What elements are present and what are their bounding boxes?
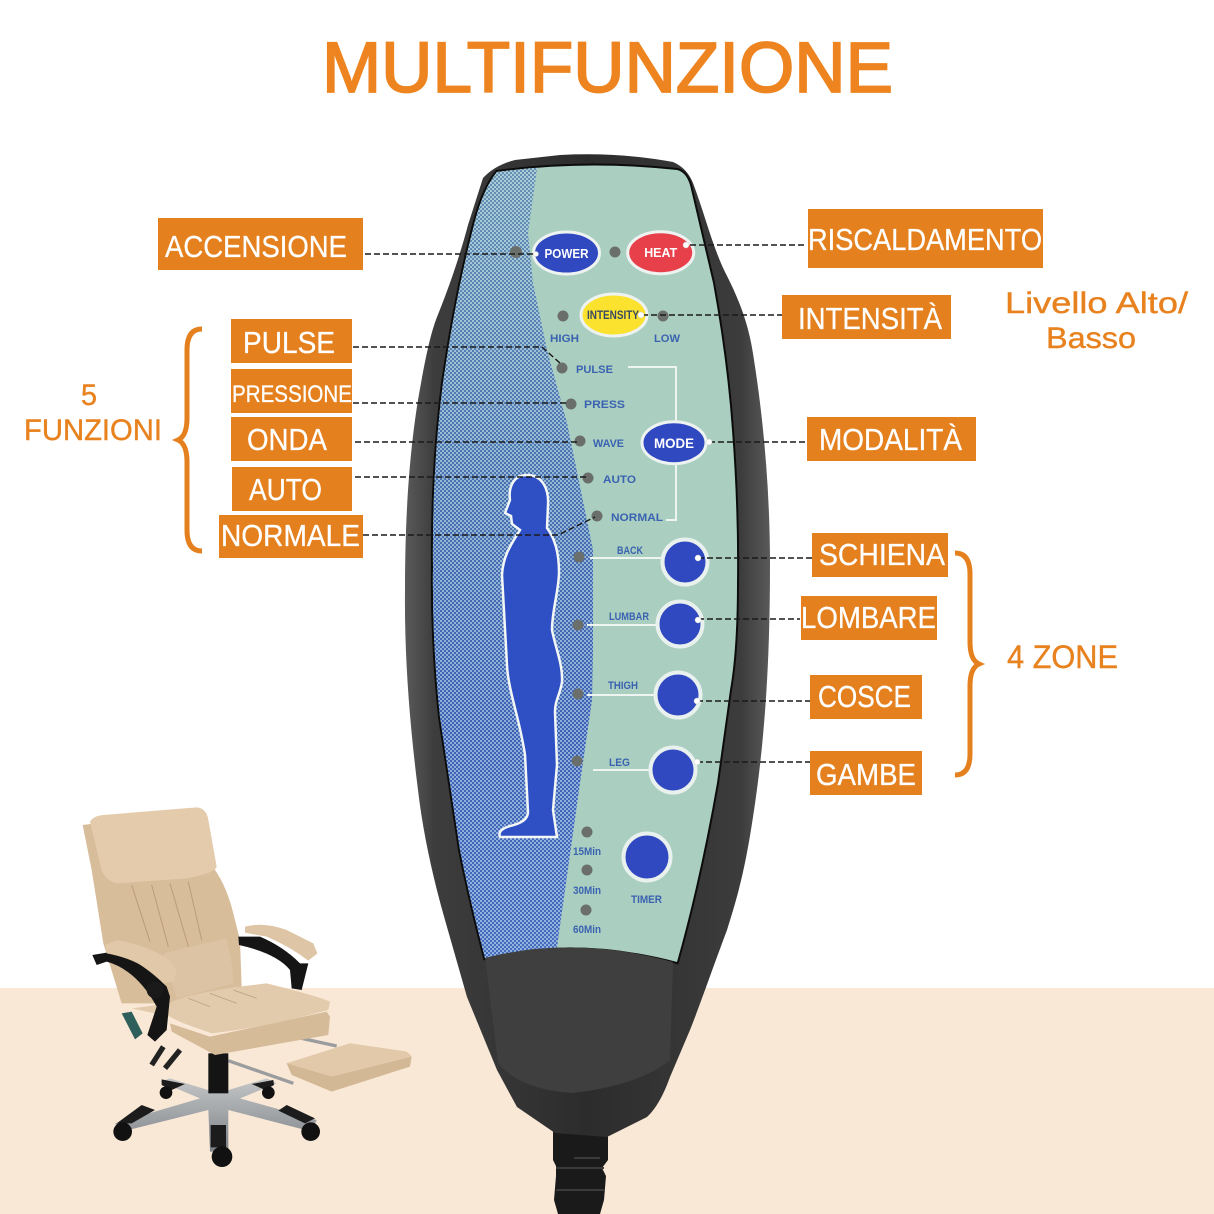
right brace xyxy=(955,553,979,775)
remote cable xyxy=(553,1130,608,1214)
panel labels: LOW xyxy=(654,333,681,345)
lumbar pillow xyxy=(163,938,233,998)
label: accensione: ACCENSIONE xyxy=(165,229,347,264)
label: auto xyxy=(232,467,352,511)
indicator lights xyxy=(510,246,668,916)
caption: livello alto basso: Livello Alto/ xyxy=(1005,287,1189,320)
control panel artwork xyxy=(425,155,745,975)
panel labels: PRESS xyxy=(584,399,625,411)
backrest xyxy=(83,810,242,1003)
headrest xyxy=(90,807,217,883)
caption: 4 zone: 4 ZONE xyxy=(1007,639,1118,675)
remote lower grip xyxy=(485,947,673,1093)
caption: livello alto basso xyxy=(1005,287,1189,355)
panel labels: 60Min xyxy=(573,924,601,936)
label: schiena: SCHIENA xyxy=(819,537,945,572)
zone buttons xyxy=(624,540,708,880)
label: pulse: PULSE xyxy=(243,325,335,360)
seat stitching xyxy=(188,990,257,1007)
chair base xyxy=(113,1078,320,1167)
panel labels: AUTO xyxy=(603,474,636,486)
gas lift xyxy=(208,1053,228,1093)
label: auto: AUTO xyxy=(249,472,322,507)
footrest rail xyxy=(228,1038,337,1083)
title: MULTIFUNZIONE xyxy=(322,29,893,108)
label: lombare: LOMBARE xyxy=(801,600,936,635)
mode connector lines xyxy=(587,367,676,770)
panel labels: 30Min xyxy=(573,885,601,897)
heat button xyxy=(628,232,694,274)
seat base xyxy=(170,1012,330,1055)
panel labels xyxy=(550,333,681,936)
levers xyxy=(152,1047,180,1068)
panel labels: PULSE xyxy=(576,364,613,376)
mini remote xyxy=(122,1012,143,1039)
panel labels: WAVE xyxy=(593,438,624,450)
remote control xyxy=(405,154,770,1214)
label: gambe: GAMBE xyxy=(816,757,916,792)
label: intensita xyxy=(782,295,951,339)
panel labels: LEG xyxy=(609,757,630,769)
label: pulse xyxy=(231,319,352,363)
remote body xyxy=(405,154,770,1137)
label: modalita: MODALITÀ xyxy=(819,422,962,457)
panel labels: TIMER xyxy=(631,894,662,906)
backrest stitching xyxy=(132,882,202,947)
label: intensita: INTENSITÀ xyxy=(798,301,942,336)
label: cosce: COSCE xyxy=(818,679,911,714)
green face xyxy=(425,155,745,970)
label: normale: NORMALE xyxy=(221,518,360,553)
label: riscaldamento xyxy=(808,209,1043,268)
panel labels: NORMAL xyxy=(611,512,663,524)
body silhouette xyxy=(499,475,562,837)
leader end nodes xyxy=(534,242,712,765)
intensity button: INTENSITY xyxy=(587,310,639,322)
caption: 5 funzioni: FUNZIONI xyxy=(24,414,162,447)
caption: 5 funzioni: 5 xyxy=(81,379,97,412)
panel labels: BACK xyxy=(617,545,643,557)
panel labels: LUMBAR xyxy=(609,611,649,623)
power button xyxy=(534,232,600,274)
footrest xyxy=(287,1043,412,1092)
left brace xyxy=(178,329,202,551)
power button: POWER xyxy=(544,246,589,261)
label: accensione xyxy=(158,218,363,270)
left armrest xyxy=(92,940,177,1042)
office chair illustration xyxy=(83,807,412,1167)
panel labels: HIGH xyxy=(550,333,579,345)
panel labels: THIGH xyxy=(608,680,638,692)
dotted blue field xyxy=(425,155,593,975)
panel labels: 15Min xyxy=(573,846,601,858)
dashed leader lines xyxy=(353,245,812,762)
label: onda: ONDA xyxy=(247,422,327,457)
heat button: HEAT xyxy=(644,245,677,260)
mode button: MODE xyxy=(654,435,694,451)
label: pressione xyxy=(231,369,352,413)
label: onda xyxy=(231,417,352,461)
seat cushion xyxy=(132,983,330,1033)
peach floor band xyxy=(0,988,1214,1214)
caption: 5 funzioni xyxy=(24,379,162,447)
intensity button xyxy=(581,294,647,336)
remote inner rim xyxy=(433,165,737,962)
label: riscaldamento: RISCALDAMENTO xyxy=(808,222,1042,257)
mode button xyxy=(642,422,706,464)
label: pressione: PRESSIONE xyxy=(232,381,352,408)
caption: livello alto basso: Basso xyxy=(1046,322,1136,355)
right armrest xyxy=(238,925,317,990)
